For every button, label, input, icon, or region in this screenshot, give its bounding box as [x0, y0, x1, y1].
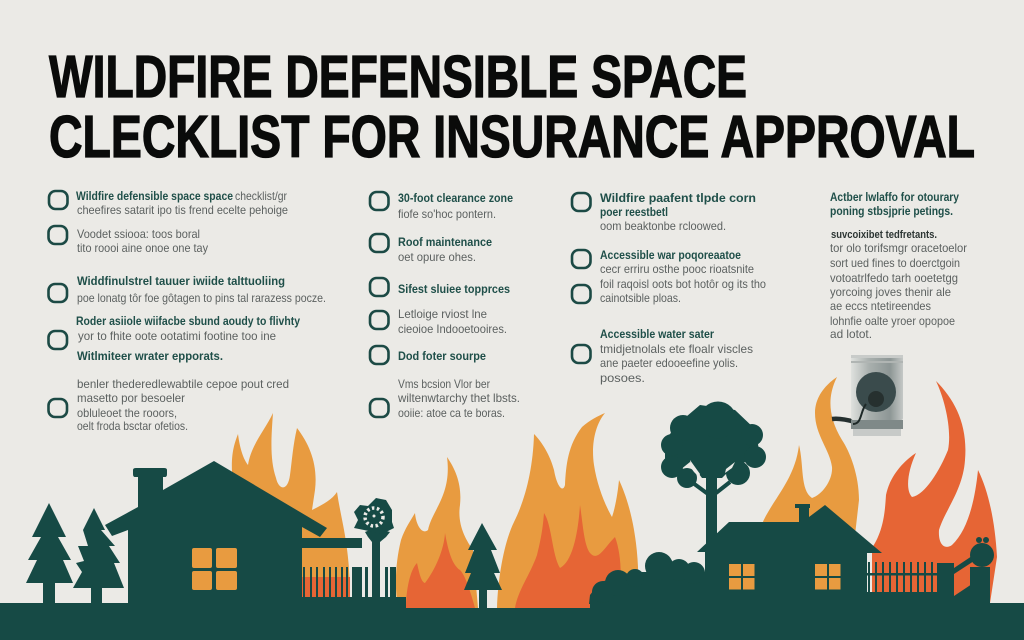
icon: right house [697, 504, 882, 604]
column 4 body: votoatrlfedo tarh ooetetgg [830, 271, 958, 285]
panel: checklist column 2 [370, 191, 520, 420]
icon: water tank canister [832, 355, 903, 436]
item 1.1: checklist/gr [235, 189, 287, 203]
item 3.4: Accessible water sater [600, 327, 714, 341]
item 2.6: ooiie: atoe ca te boras. [398, 406, 505, 420]
house window [192, 548, 237, 590]
item 2.4: Letloige rviost lne [398, 307, 487, 321]
panel: checklist column 1 [48, 189, 326, 433]
icon: shrubs [589, 552, 705, 604]
item 2.2: Roof maintenance [398, 235, 492, 249]
column 4 body [830, 229, 967, 341]
item 1.2: tito roooi aine onoe one tay [77, 241, 208, 255]
item 3.1: oom beaktonbe rcloowed. [600, 219, 726, 233]
item 3.3: foil raqoisl oots bot hotôr og its tho [600, 277, 766, 291]
item 2.1: fiofe so'hoc pontern. [398, 207, 496, 221]
item 1.4 [48, 314, 300, 363]
item 2.2 [370, 234, 492, 264]
icon: pinwheel ornament [354, 498, 394, 598]
icon: left pine tree 2 [73, 508, 124, 604]
item 2.6: Vms bcsion Vlor ber [398, 377, 490, 391]
item 3.1: poer reestbetl [600, 205, 668, 219]
item 1.5 [48, 377, 289, 433]
item 3.1: Wildfire paafent tlpde corn [600, 191, 756, 205]
item 3.4: posoes. [600, 371, 645, 385]
item 3.3: cainotsible ploas. [600, 291, 681, 305]
item 3.1 [572, 191, 756, 233]
item 1.5: masetto por besoeler [77, 391, 185, 405]
item 2.6: wiltenwtarchy thet lbsts. [397, 391, 520, 405]
column 4 heading: Actber lwlaffo for otourary [830, 190, 959, 204]
column 4 body: lohnfie oalte yroer opopoe [830, 314, 955, 328]
flame: centre large [497, 413, 638, 608]
flame: centre small [396, 457, 478, 608]
item 1.3 [48, 274, 326, 305]
item 2.5: Dod foter sourpe [398, 349, 486, 363]
item 3.4: ane paeter edooeefine yolis. [600, 356, 738, 370]
flame: right red [872, 381, 997, 603]
column 4 body: yorcoing joves thenir ale [830, 285, 951, 299]
item 1.5: obluleoet the rooors, [77, 406, 177, 420]
item 1.1: cheefires satarit ipo tis frend ecelte pehoige [77, 203, 288, 217]
column 4 body: ad lotot. [830, 327, 872, 341]
icon: porch roof and fence [302, 538, 406, 608]
icon: gate and hydrant figure [937, 537, 994, 604]
item 1.1 [49, 189, 288, 217]
icon: centre pine tree [464, 523, 502, 608]
item 2.1: 30-foot clearance zone [398, 191, 513, 205]
flame: right orange [762, 377, 859, 535]
item 1.4: yor to fhite oote ootatimi footine too ine [78, 329, 276, 343]
panel: checklist column 3 [572, 191, 766, 385]
house window left [729, 564, 754, 590]
item 2.5 [370, 346, 486, 364]
item 1.5: benler thederedlewabtile cepoe pout cred [77, 377, 289, 391]
ground [0, 603, 1024, 640]
item 2.3: Sifest sluiee topprces [398, 282, 510, 296]
item 3.2: Accessible war poqoreaatoe [600, 248, 741, 262]
item 1.3: poe lonatg tôr foe gôtagen to pins tal rarazess pocze. [77, 291, 326, 305]
column 4 body: suvcoixibet tedfretants. [831, 229, 937, 241]
icon: large tree [661, 402, 766, 556]
column 4 body: ae eccs ntetireendes [830, 299, 931, 313]
column 4 body: sort ued fines to doerctgoin [830, 256, 960, 270]
item 3.3 [572, 277, 766, 305]
house window right [815, 564, 840, 590]
item 1.2: Voodet ssiooa: toos boral [77, 227, 200, 241]
item 2.4 [370, 307, 507, 336]
column 4 body: tor olo torifsmgr oracetoelor [830, 241, 967, 255]
item 3.4 [572, 327, 753, 385]
column 4 heading [830, 190, 959, 218]
icon: right fence [867, 562, 937, 604]
item 2.3 [370, 278, 510, 296]
item 3.4: tmidjetnolals ete floalr viscles [600, 342, 753, 356]
item 2.4: cieoioe Indooetooires. [398, 322, 507, 336]
item 1.3: Widdfinulstrel tauuer iwiide talttuoliing [77, 274, 285, 288]
item 1.5: oelt froda bsctar ofetios. [77, 419, 188, 433]
item 3.2: cecr erriru osthe pooc rioatsnite [600, 262, 754, 276]
icon: left pine tree 1 [26, 503, 73, 604]
item 1.2 [48, 226, 208, 255]
panel: column 4 text [830, 190, 967, 341]
title [49, 44, 975, 170]
item 3.2 [572, 248, 754, 276]
item 2.2: oet opure ohes. [398, 250, 476, 264]
item 2.1 [370, 191, 513, 221]
item 1.4: Witlmiteer wrater epporats. [77, 349, 223, 363]
item 1.4: Roder asiiole wiifacbe sbund aoudy to flivhty [76, 314, 300, 328]
item 1.1: Wildfire defensible space space [76, 189, 233, 203]
icon: left house [105, 461, 327, 604]
column 4 heading: poning stbsjprie petings. [830, 204, 953, 218]
flame: behind left house [232, 413, 350, 597]
title: WILDFIRE DEFENSIBLE SPACE [49, 44, 747, 110]
item 2.6 [370, 377, 520, 420]
